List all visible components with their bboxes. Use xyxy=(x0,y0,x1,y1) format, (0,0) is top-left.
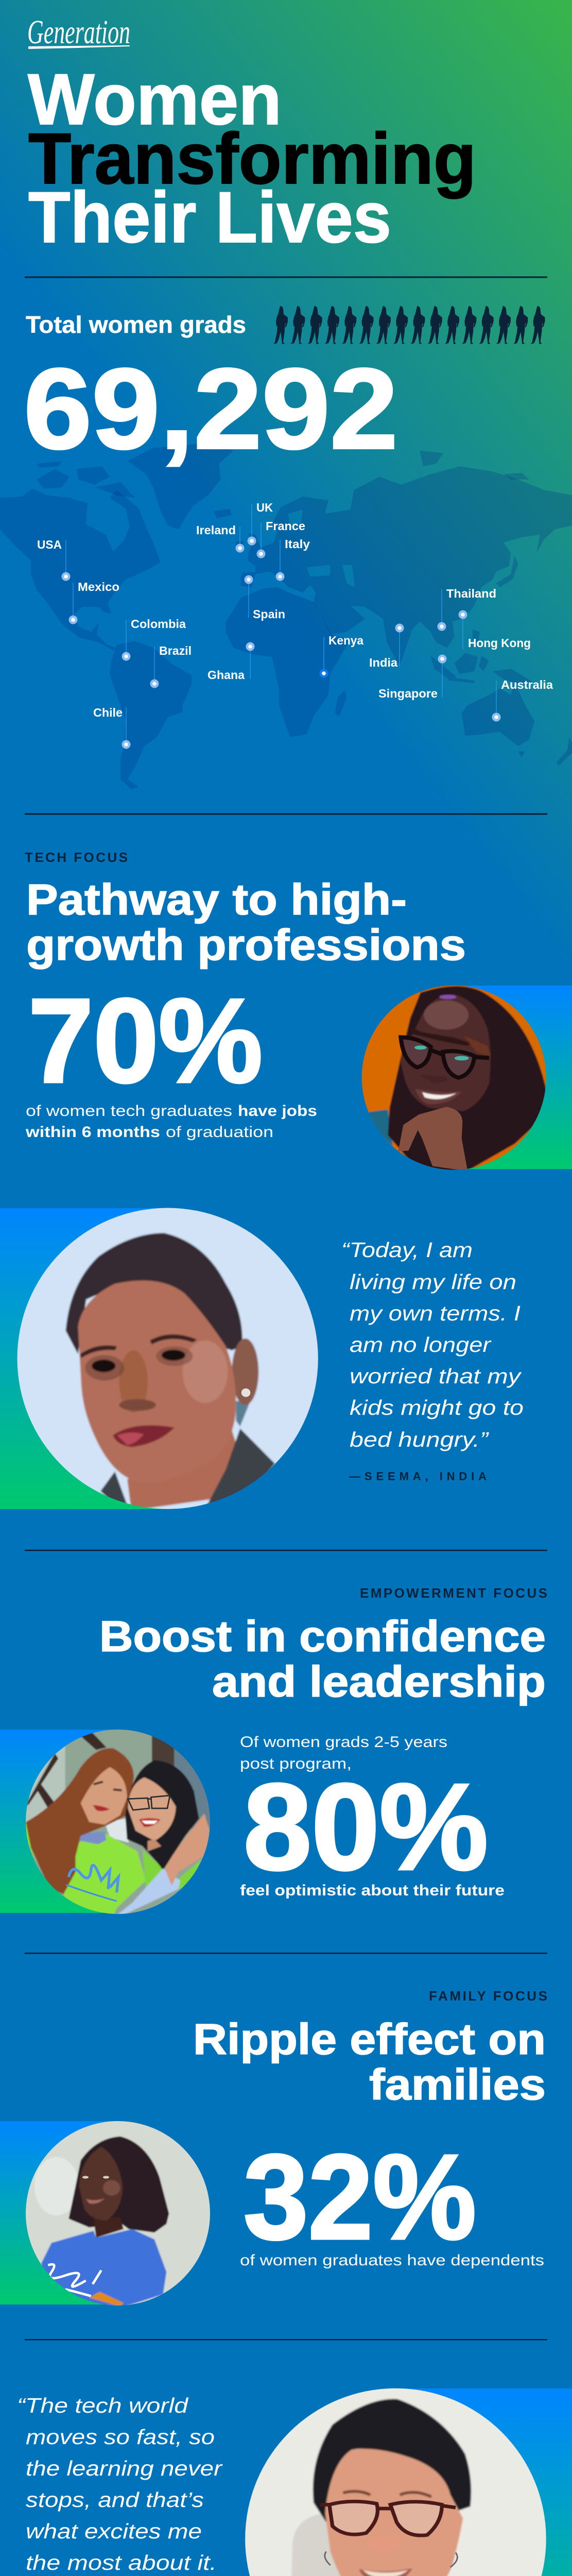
map pins and labels: Thailand xyxy=(446,587,496,600)
total number: 69,292 xyxy=(24,345,398,473)
empowerment heading xyxy=(99,1612,546,1706)
quote: Seema: my own terms. I xyxy=(350,1301,521,1325)
empowerment heading: Boost in confidence xyxy=(99,1612,546,1660)
quote: Seema: am no longer xyxy=(350,1333,492,1357)
title: Their Lives xyxy=(28,177,391,258)
map pins and labels: Singapore xyxy=(378,687,438,700)
photo panel: two graduates xyxy=(0,1730,210,1914)
stat 70 caption: of women tech graduates xyxy=(26,1103,232,1120)
map pins and labels: Colombia xyxy=(131,617,186,631)
map pins and labels xyxy=(37,501,553,749)
title: Transforming xyxy=(28,118,476,199)
quote: Sharon: stops, and that’s xyxy=(26,2488,204,2512)
stat 70 caption: have jobs xyxy=(238,1103,317,1120)
logo: Generation xyxy=(27,13,130,51)
quote: Sharon: “The tech world xyxy=(17,2394,188,2417)
map pins and labels: Australia xyxy=(501,678,553,691)
quote: Sharon: moves so fast, so xyxy=(26,2425,215,2449)
quote: Seema: bed hungry.” xyxy=(350,1428,490,1451)
quote: Seema: “Today, I am xyxy=(341,1238,473,1262)
map pins and labels: Mexico xyxy=(78,580,119,594)
quote: Sharon: the most about it. xyxy=(26,2551,217,2574)
map pins and labels: France xyxy=(266,519,305,533)
photo panel: Seema xyxy=(0,1206,328,1518)
map pins and labels: Spain xyxy=(253,607,285,621)
stat 80 intro xyxy=(240,1734,447,1772)
map pins and labels: Ireland xyxy=(196,523,236,537)
map pins and labels: USA xyxy=(37,538,62,551)
quote: Seema xyxy=(341,1238,524,1451)
world map xyxy=(0,443,572,790)
gradient background xyxy=(0,0,572,1030)
title: Women xyxy=(28,59,282,140)
logo xyxy=(27,13,130,51)
stat 80 percent: 80% xyxy=(244,1759,488,1895)
map pins and labels: Chile xyxy=(93,706,123,719)
map pins and labels: Italy xyxy=(285,537,310,551)
quote: Sharon: what excites me xyxy=(26,2519,202,2543)
family heading: families xyxy=(369,2060,546,2109)
family eyebrow: FAMILY FOCUS xyxy=(429,1988,547,2004)
map pins and labels: Hong Kong xyxy=(468,636,531,650)
attribution: Seema: —SEEMA, INDIA xyxy=(349,1470,487,1483)
photo panel: graduate in blue shirt xyxy=(0,2121,210,2306)
stat 70 caption xyxy=(25,1103,317,1141)
family heading xyxy=(193,2015,546,2109)
stat 70 percent: 70% xyxy=(28,974,263,1108)
photo panel: Sharon xyxy=(242,2385,572,2576)
stat 70 caption: of graduation xyxy=(166,1124,273,1141)
stat 80 intro: post program, xyxy=(240,1755,352,1772)
stat 32 percent: 32% xyxy=(244,2129,476,2264)
stat 80 caption: feel optimistic about their future xyxy=(240,1882,505,1899)
quote: Seema: worried that my xyxy=(350,1364,522,1388)
map pins and labels: UK xyxy=(256,501,273,514)
photo panel: smiling graduate xyxy=(360,984,572,1173)
title xyxy=(28,59,476,258)
stat 70 caption: within 6 months xyxy=(25,1124,160,1141)
quote: Sharon: the learning never xyxy=(26,2456,223,2480)
family heading: Ripple effect on xyxy=(193,2015,546,2063)
tech heading: growth professions xyxy=(26,921,466,969)
tech focus eyebrow: TECH FOCUS xyxy=(25,850,128,865)
quote: Seema: living my life on xyxy=(350,1270,516,1294)
map pins and labels: Kenya xyxy=(328,634,363,647)
empowerment eyebrow: EMPOWERMENT FOCUS xyxy=(360,1585,547,1601)
stat 80 intro: Of women grads 2-5 years xyxy=(240,1734,447,1751)
tech heading xyxy=(26,875,466,969)
map pins and labels: Ghana xyxy=(207,668,245,682)
map pins and labels: India xyxy=(369,656,397,669)
map pins and labels: Brazil xyxy=(159,644,192,657)
quote: Sharon xyxy=(17,2394,223,2576)
tech heading: Pathway to high- xyxy=(26,875,407,924)
quote: Seema: kids might go to xyxy=(350,1396,524,1419)
stat 32 caption: of women graduates have dependents xyxy=(240,2252,544,2269)
empowerment heading: and leadership xyxy=(212,1657,546,1706)
row of women icons xyxy=(273,306,545,344)
total women grads label: Total women grads xyxy=(26,311,246,338)
